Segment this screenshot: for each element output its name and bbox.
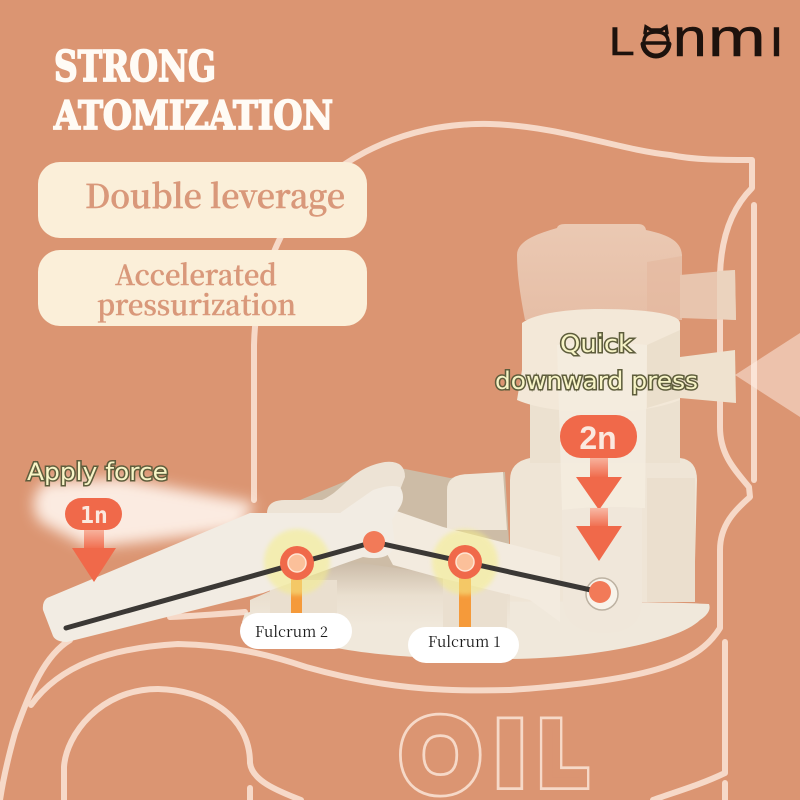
title: STRONG	[54, 42, 216, 91]
right lever arm	[370, 507, 560, 622]
base disc	[242, 602, 710, 659]
pump head	[517, 309, 680, 412]
ghost pump head: upper position	[517, 224, 736, 320]
fulcrum post 2	[270, 580, 337, 620]
oil label on bottle	[403, 702, 586, 800]
oil label on bottle: L	[541, 705, 586, 800]
callout: double leverage: Double leverage	[85, 171, 345, 218]
oil label on bottle: I	[498, 706, 522, 800]
rear mechanism	[250, 462, 510, 630]
fulcrum glow 1	[432, 529, 498, 595]
label: fulcrum 1: Fulcrum 1	[428, 631, 501, 652]
logo letter n: n	[673, 8, 707, 68]
left lever arm	[43, 486, 403, 642]
pump neck	[530, 398, 680, 463]
rear arm	[267, 462, 405, 528]
floor shadow	[250, 560, 510, 625]
label: downward press: downward press	[495, 367, 698, 395]
pump nozzle	[680, 350, 736, 403]
apex pivot ball	[363, 531, 385, 553]
label: quick: Quick	[560, 330, 633, 358]
label: fulcrum 2: Fulcrum 2	[255, 621, 328, 642]
arrow: 2n force	[560, 415, 637, 561]
callout: double leverage	[38, 162, 367, 238]
oil label on bottle: I	[498, 706, 522, 800]
logo letter L: L	[609, 20, 635, 64]
label: apply force: Apply force	[27, 458, 168, 486]
callout: accelerated pressurization: Accelerated	[115, 254, 277, 294]
logo letter i: ı	[769, 8, 784, 68]
title: ATOMIZATION	[53, 93, 333, 139]
title	[53, 42, 333, 139]
fulcrum pivot 1	[448, 545, 482, 579]
fulcrum glow 2	[264, 529, 330, 595]
fulcrum post 1	[443, 570, 507, 630]
logo icon: cat face	[643, 27, 669, 56]
output pivot ball	[589, 581, 611, 603]
callout: accelerated pressurization	[38, 250, 367, 326]
arrow: 1n force	[65, 498, 122, 582]
fulcrum stem 2	[291, 572, 302, 614]
lever force line	[66, 542, 600, 628]
pump body	[510, 309, 736, 602]
output lever strip	[557, 342, 647, 633]
oil label on bottle: L	[541, 705, 586, 800]
fulcrum stem 1	[459, 572, 471, 628]
rear bracket	[447, 472, 507, 530]
callout: accelerated pressurization: pressurization	[97, 284, 296, 324]
pump base	[510, 458, 697, 602]
logo: Lanmi wordmark	[609, 8, 784, 68]
bottle outline illustration	[0, 124, 754, 800]
fulcrum pivot 2	[280, 546, 314, 580]
spray from nozzle	[735, 333, 800, 417]
label: fulcrum 1	[408, 627, 519, 663]
spray cloud behind handle	[34, 478, 255, 548]
label: fulcrum 2	[240, 613, 352, 649]
output pivot socket	[586, 578, 618, 610]
arrow: 1n force: 1n	[80, 503, 108, 529]
arrow: 2n force: 2n	[579, 420, 617, 456]
logo letter m: m	[708, 8, 766, 68]
